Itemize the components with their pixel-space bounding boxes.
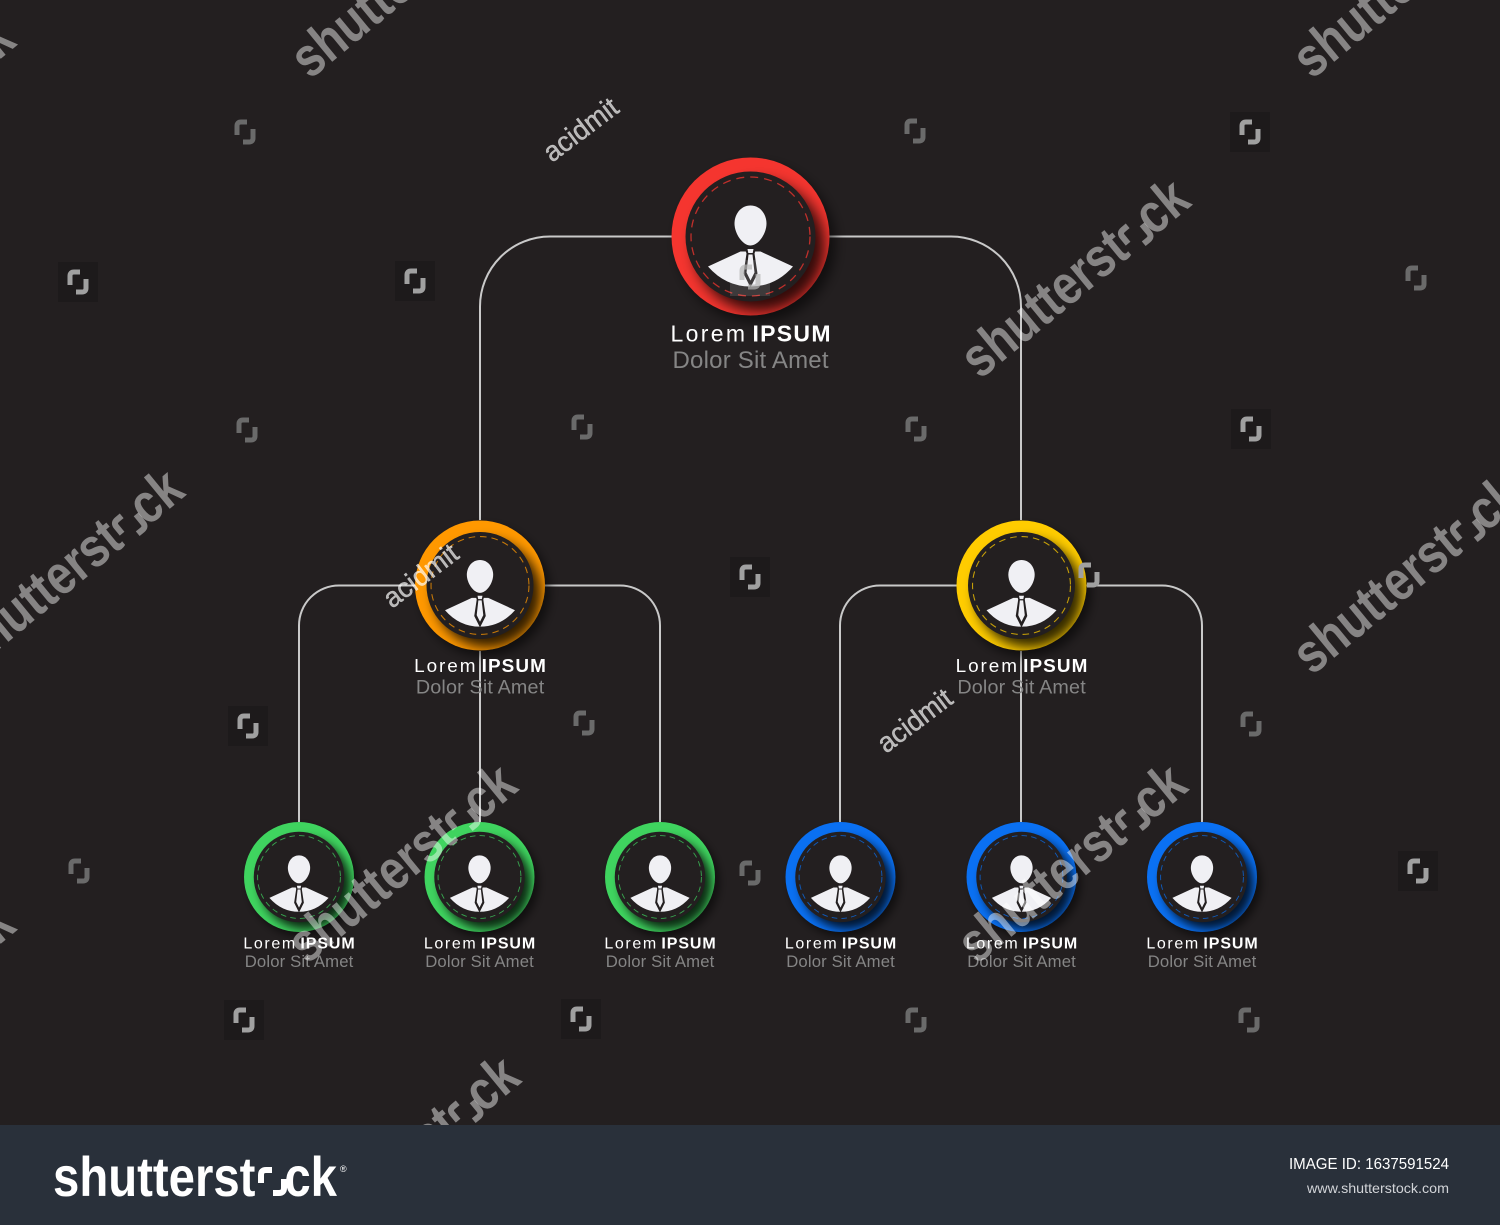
node: top executive, red [670, 158, 836, 374]
watermark text: shutterstock [275, 750, 528, 974]
node: staff 6, blue [1146, 822, 1261, 971]
registered mark: ® [340, 1164, 347, 1174]
connector lines [299, 236, 1202, 822]
watermark text: acidmit [871, 682, 958, 759]
image id: IMAGE ID: 1637591524 [1289, 1156, 1449, 1173]
node: staff 3, green [604, 822, 719, 971]
watermark icons [58, 112, 1438, 1040]
footer logo broken o [261, 1170, 284, 1193]
node: staff 4, blue [785, 822, 900, 971]
website: www.shutterstock.com [1306, 1180, 1449, 1196]
footer logo: shutterstock [53, 1145, 338, 1208]
footer bar [0, 1125, 1500, 1225]
watermark text: shutterstock [948, 165, 1201, 389]
watermark text: acidmit [537, 91, 624, 168]
watermark text: shutterstock [945, 750, 1198, 974]
node: manager, orange [414, 520, 550, 699]
node: manager, yellow [956, 520, 1091, 699]
node: staff 2, green [424, 822, 539, 971]
watermark text: acidmit [377, 537, 464, 614]
node: staff 1, green [243, 822, 358, 971]
node: staff 5, blue [966, 822, 1081, 971]
